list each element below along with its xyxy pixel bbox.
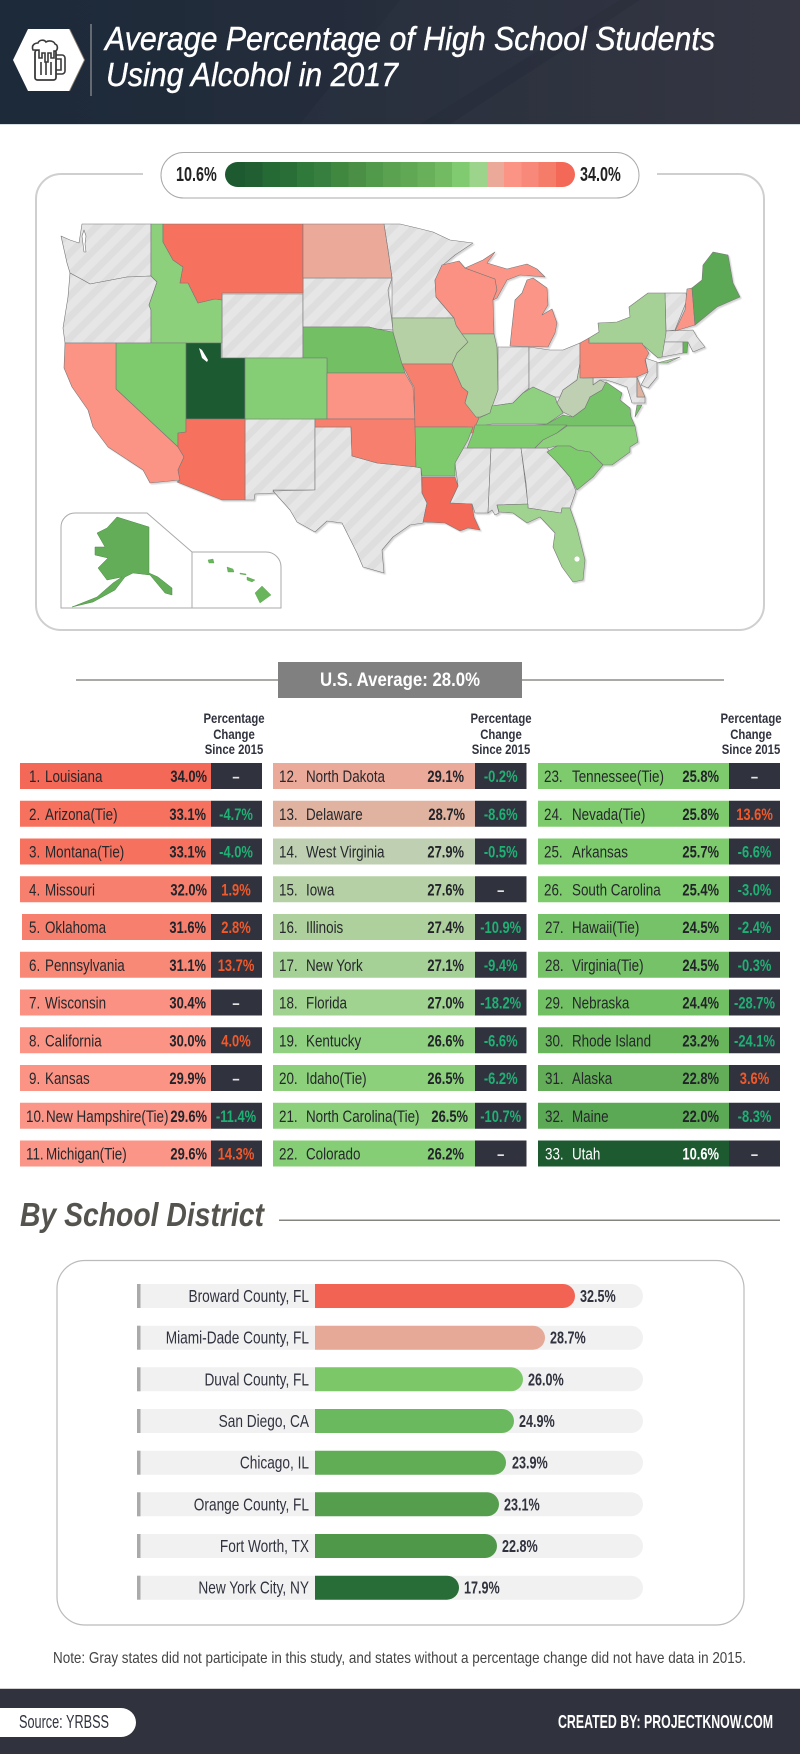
row 33 Utah: Utah xyxy=(572,1145,600,1164)
table column 1 xyxy=(20,763,262,1166)
row 32 Maine: Maine xyxy=(572,1107,609,1126)
row 5 Oklahoma xyxy=(22,914,262,940)
column header: percentage change, column 1 xyxy=(203,710,265,757)
Washington inlet xyxy=(82,230,86,252)
title xyxy=(103,20,715,93)
Arizona xyxy=(177,419,245,500)
row 3 Montana xyxy=(20,838,262,864)
row 17 New York: 27.1% xyxy=(427,956,464,975)
Michigan lower xyxy=(510,278,557,347)
row 20 Idaho: 20. xyxy=(279,1070,298,1088)
row 21 North Carolina: 21. xyxy=(279,1107,298,1126)
row 22 Colorado: Colorado xyxy=(306,1145,360,1164)
row 5 Oklahoma: 5. xyxy=(29,919,40,937)
row 2 Arizona: Arizona(Tie) xyxy=(45,805,118,824)
bar: Broward County: 32.5% xyxy=(580,1287,616,1307)
row 26 South Carolina: -3.0% xyxy=(738,881,772,900)
row 4 Missouri: 32.0% xyxy=(170,881,207,900)
row 16 Illinois: 27.4% xyxy=(427,918,464,938)
row 21 North Carolina: North Carolina(Tie) xyxy=(306,1107,420,1126)
row 4 Missouri: 4. xyxy=(29,881,40,900)
bar: Fort Worth: 22.8% xyxy=(502,1537,538,1557)
row 33 Utah: 33. xyxy=(545,1145,564,1164)
row 7 Wisconsin: 30.4% xyxy=(169,994,206,1013)
row 17 New York: -9.4% xyxy=(484,956,518,975)
row 8 California: 4.0% xyxy=(221,1032,251,1051)
row 16 Illinois: Illinois xyxy=(306,919,344,937)
row 20 Idaho xyxy=(273,1065,526,1091)
row 13 Delaware: -8.6% xyxy=(484,805,518,824)
row 10 New Hampshire: 10. xyxy=(26,1107,45,1126)
row 14 West Virginia: 27.9% xyxy=(427,843,464,862)
row 10 New Hampshire: 29.6% xyxy=(170,1107,207,1126)
row 31 Alaska: Alaska xyxy=(572,1070,613,1088)
Virginia xyxy=(527,382,635,426)
Colorado xyxy=(245,358,327,419)
column header: percentage change, column 3: Since 2015 xyxy=(722,741,780,757)
row 18 Florida: Florida xyxy=(306,994,347,1013)
row 21 North Carolina: -10.7% xyxy=(480,1107,522,1126)
row 7 Wisconsin: – xyxy=(232,994,240,1013)
row 12 North Dakota: -0.2% xyxy=(484,767,518,787)
Lake Okeechobee xyxy=(574,556,580,562)
row 1 Louisiana: – xyxy=(232,767,240,787)
row 8 California: California xyxy=(45,1032,102,1051)
row 7 Wisconsin: Wisconsin xyxy=(45,994,106,1013)
row 33 Utah: 10.6% xyxy=(682,1145,719,1164)
Arkansas xyxy=(415,427,473,476)
row 4 Missouri xyxy=(20,876,262,902)
row 25 Arkansas: 25.7% xyxy=(682,843,719,862)
row 18 Florida: 18. xyxy=(279,994,298,1013)
Nevada xyxy=(116,343,186,447)
icon: Alaska xyxy=(72,517,172,607)
Idaho xyxy=(149,224,222,343)
New Hampshire xyxy=(675,288,695,331)
North Dakota xyxy=(303,224,392,278)
row 22 Colorado: 26.2% xyxy=(427,1145,464,1164)
row 23 Tennessee: – xyxy=(751,767,758,787)
row 24 Nevada: Nevada(Tie) xyxy=(572,805,645,824)
row 1 Louisiana: Louisiana xyxy=(45,768,103,786)
Virginia eastern shore xyxy=(635,405,642,417)
row 20 Idaho: -6.2% xyxy=(484,1069,518,1089)
bar: Chicago xyxy=(137,1451,643,1475)
Florida xyxy=(497,504,585,582)
row 16 Illinois: 16. xyxy=(279,919,298,937)
Salt Lake xyxy=(199,348,208,362)
inset: Alaska and Hawaii xyxy=(61,513,281,608)
Kentucky xyxy=(475,387,563,427)
icon: beer mug in hexagon xyxy=(13,29,85,91)
row 14 West Virginia: 14. xyxy=(279,843,298,862)
row 1 Louisiana: 34.0% xyxy=(170,767,207,787)
bar: Orange County: 23.1% xyxy=(504,1495,540,1515)
bar: San Diego: 24.9% xyxy=(519,1412,555,1432)
row 28 Virginia: 24.5% xyxy=(682,956,719,975)
row 21 North Carolina: 26.5% xyxy=(431,1107,468,1126)
source pill xyxy=(0,1708,136,1737)
row 31 Alaska xyxy=(538,1065,780,1091)
icon: Hawaii xyxy=(208,559,271,603)
row 6 Pennsylvania: 13.7% xyxy=(218,956,255,975)
row 5 Oklahoma: 31.6% xyxy=(169,918,206,938)
Michigan upper xyxy=(465,252,545,300)
title: Using Alcohol in 2017 xyxy=(106,56,400,93)
row 3 Montana: 3. xyxy=(29,843,40,862)
row 25 Arkansas: 25. xyxy=(544,843,563,862)
row 11 Michigan: Michigan(Tie) xyxy=(46,1145,127,1164)
bar: San Diego: San Diego, CA xyxy=(219,1412,309,1432)
row 19 Kentucky xyxy=(273,1027,526,1053)
row 19 Kentucky: 26.6% xyxy=(427,1032,464,1051)
row 27 Hawaii xyxy=(538,914,780,940)
footer xyxy=(0,1688,800,1754)
row 1 Louisiana: 1. xyxy=(29,768,40,786)
row 7 Wisconsin: 7. xyxy=(29,994,40,1013)
bar: Fort Worth xyxy=(137,1534,643,1558)
bar: New York City xyxy=(137,1576,643,1600)
row 29 Nebraska xyxy=(538,990,780,1016)
row 3 Montana: -4.0% xyxy=(219,843,253,862)
row 29 Nebraska: 24.4% xyxy=(682,994,719,1013)
row 6 Pennsylvania: 31.1% xyxy=(169,956,206,975)
column header: percentage change, column 1: Since 2015 xyxy=(205,741,263,757)
row 30 Rhode Island: -24.1% xyxy=(734,1032,775,1051)
row 14 West Virginia xyxy=(273,838,526,864)
Long Island xyxy=(657,357,680,363)
row 2 Arizona: -4.7% xyxy=(219,805,253,824)
row 13 Delaware: 13. xyxy=(279,805,298,824)
row 12 North Dakota: 12. xyxy=(279,768,298,786)
bar: Broward County xyxy=(137,1284,643,1308)
heading: U.S. average xyxy=(76,662,724,698)
column header: percentage change, column 2 xyxy=(470,710,532,757)
column header: percentage change, column 3 xyxy=(720,710,782,757)
bar: New York City: New York City, NY xyxy=(198,1579,309,1598)
Delaware xyxy=(637,377,645,397)
row 17 New York: 17. xyxy=(279,956,298,975)
row 19 Kentucky: Kentucky xyxy=(306,1032,361,1051)
row 33 Utah: – xyxy=(751,1145,758,1164)
row 22 Colorado: 22. xyxy=(279,1145,298,1164)
row 24 Nevada: 24. xyxy=(544,805,563,824)
bar: Miami-Dade County: 28.7% xyxy=(550,1329,586,1348)
row 14 West Virginia: West Virginia xyxy=(306,843,385,862)
Illinois xyxy=(452,334,498,417)
row 17 New York xyxy=(273,952,526,978)
map: United States by state xyxy=(61,224,740,582)
Rhode Island xyxy=(683,342,688,353)
legend: colour scale: 10.6% xyxy=(176,163,217,186)
bar: Fort Worth: Fort Worth, TX xyxy=(220,1537,309,1557)
row 12 North Dakota: 29.1% xyxy=(427,767,464,787)
source pill: Source: YRBSS xyxy=(19,1712,109,1732)
row 13 Delaware: 28.7% xyxy=(428,805,465,824)
row 5 Oklahoma: Oklahoma xyxy=(45,919,107,937)
Missouri xyxy=(402,364,479,433)
row 31 Alaska: 22.8% xyxy=(682,1069,719,1089)
column header: percentage change, column 1: Change xyxy=(213,726,255,742)
row 3 Montana: 33.1% xyxy=(169,843,206,862)
row 30 Rhode Island: 23.2% xyxy=(682,1032,719,1051)
West Virginia xyxy=(557,363,606,417)
row 15 Iowa: – xyxy=(497,881,504,900)
row 8 California: 8. xyxy=(29,1032,40,1051)
row 25 Arkansas xyxy=(538,838,780,864)
row 29 Nebraska: 29. xyxy=(545,994,564,1013)
row 24 Nevada: 13.6% xyxy=(736,805,773,824)
heading: U.S. average: U.S. Average: 28.0% xyxy=(320,670,480,691)
table column 2 xyxy=(273,763,526,1166)
row 13 Delaware: Delaware xyxy=(306,805,363,824)
bar: Duval County: 26.0% xyxy=(528,1370,564,1390)
Wisconsin xyxy=(435,261,497,334)
row 16 Illinois xyxy=(273,914,526,940)
row 28 Virginia: -0.3% xyxy=(738,956,772,975)
row 9 Kansas: Kansas xyxy=(45,1070,90,1088)
Oklahoma xyxy=(315,419,416,467)
Kansas xyxy=(327,373,415,419)
row 26 South Carolina: 26. xyxy=(544,881,563,900)
row 11 Michigan: 11. xyxy=(26,1145,44,1164)
row 4 Missouri: 1.9% xyxy=(221,881,251,900)
header banner xyxy=(0,0,800,125)
row 22 Colorado: – xyxy=(497,1145,504,1164)
column header: percentage change, column 2: Change xyxy=(480,726,522,742)
row 23 Tennessee xyxy=(538,763,780,789)
row 26 South Carolina: South Carolina xyxy=(572,881,661,900)
row 30 Rhode Island: Rhode Island xyxy=(572,1032,651,1051)
bar: Miami-Dade County: Miami-Dade County, FL xyxy=(166,1329,309,1348)
panel: school district chart xyxy=(57,1260,744,1625)
row 14 West Virginia: -0.5% xyxy=(484,843,518,862)
row 32 Maine: 22.0% xyxy=(682,1107,719,1126)
row 7 Wisconsin xyxy=(20,990,262,1016)
bar: Duval County xyxy=(137,1367,643,1391)
row 24 Nevada: 25.8% xyxy=(682,805,719,824)
Maine xyxy=(692,252,740,325)
Louisiana xyxy=(422,477,480,531)
Iowa xyxy=(392,318,468,364)
row 29 Nebraska: -28.7% xyxy=(734,994,775,1013)
row 20 Idaho: 26.5% xyxy=(427,1069,464,1089)
row 20 Idaho: Idaho(Tie) xyxy=(306,1070,367,1088)
bar: Duval County: Duval County, FL xyxy=(204,1371,309,1390)
row 18 Florida: -18.2% xyxy=(480,994,522,1013)
row 30 Rhode Island xyxy=(538,1027,780,1053)
bar: San Diego xyxy=(137,1409,643,1433)
row 28 Virginia: 28. xyxy=(545,956,564,975)
row 21 North Carolina xyxy=(273,1103,526,1129)
row 10 New Hampshire xyxy=(20,1103,262,1129)
header divider xyxy=(90,24,92,96)
row 26 South Carolina: 25.4% xyxy=(682,881,719,900)
column header: percentage change, column 2: Since 2015 xyxy=(472,741,530,757)
row 8 California: 30.0% xyxy=(169,1032,206,1051)
row 15 Iowa: Iowa xyxy=(306,881,335,900)
row 31 Alaska: 31. xyxy=(545,1070,564,1088)
row 3 Montana: Montana(Tie) xyxy=(45,843,124,862)
row 31 Alaska: 3.6% xyxy=(740,1069,770,1089)
row 2 Arizona xyxy=(20,801,262,827)
row 11 Michigan xyxy=(20,1140,262,1166)
row 32 Maine xyxy=(538,1103,780,1129)
bar: Orange County: Orange County, FL xyxy=(194,1496,309,1515)
row 2 Arizona: 2. xyxy=(29,805,40,824)
row 29 Nebraska: Nebraska xyxy=(572,994,630,1013)
row 23 Tennessee: 23. xyxy=(544,768,563,786)
row 28 Virginia: Virginia(Tie) xyxy=(572,956,644,975)
panel: map frame xyxy=(36,174,764,630)
row 15 Iowa: 27.6% xyxy=(427,881,464,900)
row 9 Kansas: – xyxy=(232,1069,240,1089)
row 10 New Hampshire: -11.4% xyxy=(216,1107,257,1126)
row 33 Utah xyxy=(538,1140,780,1166)
row 27 Hawaii: Hawaii(Tie) xyxy=(572,919,639,937)
bar: Chicago: Chicago, IL xyxy=(240,1454,309,1473)
bar: Broward County: Broward County, FL xyxy=(188,1287,309,1307)
column header: percentage change, column 3: Percentage xyxy=(720,710,782,726)
row 25 Arkansas: Arkansas xyxy=(572,843,628,862)
table column 3 xyxy=(538,763,780,1166)
row 32 Maine: 32. xyxy=(545,1107,564,1126)
row 9 Kansas: 29.9% xyxy=(169,1069,206,1089)
gray states xyxy=(61,224,705,573)
row 28 Virginia xyxy=(538,952,780,978)
row 6 Pennsylvania xyxy=(20,952,262,978)
column header: percentage change, column 2: Percentage xyxy=(470,710,532,726)
row 15 Iowa: 15. xyxy=(279,881,298,900)
title: Average Percentage of High School Students xyxy=(103,20,715,57)
legend: colour scale xyxy=(161,152,639,198)
row 11 Michigan: 14.3% xyxy=(218,1145,255,1164)
row 19 Kentucky: 19. xyxy=(279,1032,298,1051)
bar: Orange County xyxy=(137,1492,643,1516)
bar: Chicago: 23.9% xyxy=(512,1454,548,1473)
row 9 Kansas: 9. xyxy=(29,1070,40,1088)
legend: colour scale: 34.0% xyxy=(580,163,621,186)
bar: New York City: 17.9% xyxy=(464,1579,500,1598)
row 9 Kansas xyxy=(20,1065,262,1091)
row 10 New Hampshire: New Hampshire(Tie) xyxy=(46,1107,168,1126)
South Carolina xyxy=(547,446,603,490)
heading: by school district: By School District xyxy=(20,1196,266,1233)
row 5 Oklahoma: 2.8% xyxy=(221,918,251,938)
bar: Miami-Dade County xyxy=(137,1326,643,1350)
row 6 Pennsylvania: Pennsylvania xyxy=(45,956,125,975)
row 18 Florida xyxy=(273,990,526,1016)
row 27 Hawaii: 24.5% xyxy=(682,918,719,938)
row 2 Arizona: 33.1% xyxy=(169,805,206,824)
row 12 North Dakota: North Dakota xyxy=(306,768,385,786)
row 30 Rhode Island: 30. xyxy=(545,1032,564,1051)
North Carolina xyxy=(535,426,638,465)
row 15 Iowa xyxy=(273,876,526,902)
Tennessee xyxy=(467,425,567,448)
Pennsylvania xyxy=(580,338,649,378)
Utah xyxy=(186,343,245,419)
row 27 Hawaii: -2.4% xyxy=(738,918,772,938)
row 18 Florida: 27.0% xyxy=(427,994,464,1013)
row 1 Louisiana xyxy=(20,763,262,789)
row 27 Hawaii: 27. xyxy=(545,919,564,937)
row 17 New York: New York xyxy=(306,956,363,975)
row 32 Maine: -8.3% xyxy=(738,1107,772,1126)
row 26 South Carolina xyxy=(538,876,780,902)
row 8 California xyxy=(20,1027,262,1053)
column header: percentage change, column 1: Percentage xyxy=(203,710,265,726)
row 16 Illinois: -10.9% xyxy=(480,918,522,938)
row 19 Kentucky: -6.6% xyxy=(484,1032,518,1051)
row 22 Colorado xyxy=(273,1140,526,1166)
row 25 Arkansas: -6.6% xyxy=(738,843,772,862)
row 6 Pennsylvania: 6. xyxy=(29,956,40,975)
row 24 Nevada xyxy=(538,801,780,827)
row 12 North Dakota xyxy=(273,763,526,789)
row 23 Tennessee: 25.8% xyxy=(682,767,719,787)
row 13 Delaware xyxy=(273,801,526,827)
column header: percentage change, column 3: Change xyxy=(730,726,772,742)
New York xyxy=(589,293,666,358)
row 11 Michigan: 29.6% xyxy=(170,1145,207,1164)
row 23 Tennessee: Tennessee(Tie) xyxy=(572,768,664,786)
Nebraska xyxy=(303,327,405,373)
California xyxy=(64,343,184,483)
Montana xyxy=(163,224,303,303)
row 4 Missouri: Missouri xyxy=(45,881,95,900)
